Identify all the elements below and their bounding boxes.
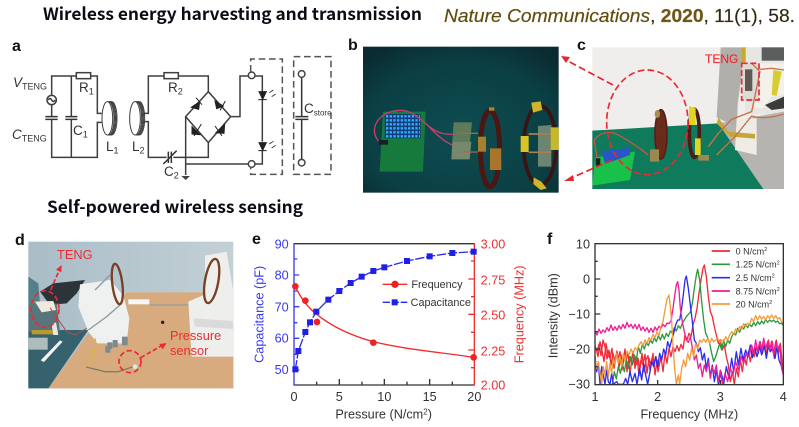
red dashed circle	[607, 70, 688, 175]
2.5 N/cm2 blue	[595, 276, 783, 384]
tape and rectifier	[451, 122, 480, 159]
panel d: pressure sensing photo	[15, 232, 233, 388]
frequency markers	[292, 283, 477, 361]
circuit labels: 2	[140, 146, 145, 156]
capacitance line	[295, 252, 474, 369]
terminal circles	[248, 71, 305, 167]
dark green background	[363, 47, 559, 193]
panel e: pressure chart	[252, 231, 527, 422]
axes frame	[595, 244, 783, 385]
panel a: circuit diagram	[12, 38, 332, 180]
bridge rectifier diodes	[191, 98, 225, 136]
legend	[383, 279, 471, 309]
circuit labels: C	[304, 101, 314, 116]
secondary circuit wiring	[144, 76, 262, 175]
circuit labels: L	[106, 139, 114, 154]
legend: 20 N/cm	[736, 299, 769, 309]
x axis title: Pressure (N/cm	[335, 408, 423, 422]
spectra lines	[595, 265, 783, 384]
x axis tick labels: 2	[654, 390, 661, 404]
legend: 8.75 N/cm	[736, 286, 777, 296]
circuit board with LED matrix	[374, 110, 471, 172]
dashed box: LED load	[251, 59, 282, 174]
TENG label: TENG	[705, 52, 738, 66]
circuit labels	[12, 75, 332, 180]
x axis tick labels: 15	[423, 390, 437, 404]
left axis tick labels: 60	[275, 332, 289, 346]
red extra noise	[596, 342, 662, 373]
legend: 2	[769, 300, 772, 306]
legend: Frequency	[411, 279, 463, 291]
x axis tick labels	[290, 390, 481, 404]
labels in photo d: sensor	[170, 343, 209, 358]
component: AC source and capacitors	[45, 95, 77, 119]
circuit labels: L	[132, 139, 140, 154]
circuit labels: R	[79, 80, 89, 95]
legend: 0 N/cm	[736, 246, 764, 256]
wall	[28, 242, 233, 388]
arrows to panel b	[566, 60, 613, 179]
power strip and cable	[88, 275, 188, 330]
circuit labels: 2	[178, 86, 183, 96]
component: resistor R2	[164, 73, 178, 79]
legend: Capacitance	[411, 297, 471, 309]
right axis title: Frequency (MHz)	[513, 265, 527, 363]
x axis tick labels: 20	[467, 390, 481, 404]
capacitance markers	[292, 249, 477, 372]
primary circuit wiring	[52, 76, 102, 157]
left axis title: Capacitance (pF)	[252, 266, 266, 363]
right side equipment background	[718, 47, 784, 189]
circuit labels: 1	[114, 146, 119, 156]
y axis tick labels: −10	[569, 307, 590, 321]
transmitting coil with yellow tape	[521, 101, 559, 190]
x axis title: Frequency (MHz)	[640, 408, 738, 422]
dashed box: storage capacitor	[294, 57, 331, 174]
panel b: LED photo	[348, 37, 559, 193]
panel f: spectra chart	[546, 231, 787, 422]
LED board	[592, 132, 648, 186]
panel c: setup photo	[561, 37, 784, 189]
x axis tick labels: 5	[336, 390, 343, 404]
legend: 2	[777, 287, 780, 293]
red dashed rectangle around TENG	[742, 63, 759, 100]
circuit labels: R	[168, 80, 178, 95]
grey pillar	[717, 47, 745, 127]
coil L1	[102, 102, 117, 135]
coil L2	[130, 102, 145, 135]
labels in photo d	[57, 247, 221, 358]
panel e: pressure chart: e	[252, 231, 261, 248]
right axis tick labels: 3.00	[481, 237, 505, 251]
legend: 2	[764, 247, 767, 253]
storage capacitor	[295, 77, 308, 159]
TENG device	[28, 277, 87, 335]
frequency curve	[295, 286, 474, 357]
component: variable capacitor C2	[163, 151, 177, 164]
0 N/cm2 red	[595, 265, 783, 384]
right axis tick labels: 2.50	[481, 308, 505, 322]
x axis tick labels: 10	[377, 390, 391, 404]
left axis tick labels: 80	[275, 268, 289, 282]
circuit labels: 2	[174, 170, 179, 180]
labels in photo d: Pressure	[170, 328, 221, 343]
y axis tick labels	[569, 237, 590, 392]
wall	[592, 47, 784, 189]
right axis tick labels	[481, 237, 505, 392]
LEDs in dashed box	[258, 90, 276, 151]
circuit labels: 1	[83, 130, 88, 140]
coil two with tape	[689, 106, 701, 157]
right axis tick labels: 2.75	[481, 273, 505, 287]
foam boxes	[78, 252, 233, 357]
title: wireless energy harvesting: Wireless energy harvesting and transmission	[43, 0, 422, 25]
receiving coil	[478, 107, 501, 187]
ground symbol	[181, 176, 190, 180]
1.25 N/cm2 green	[612, 269, 783, 384]
circuit labels: TENG	[22, 134, 47, 144]
panel c: setup photo: c	[577, 37, 586, 54]
wooden table	[48, 292, 233, 388]
8.75 N/cm2 magenta	[595, 282, 783, 384]
red arrows	[51, 270, 162, 358]
x axis tick labels: 0	[290, 390, 298, 404]
red dashed circles	[31, 291, 141, 373]
circuit labels: TENG	[22, 82, 47, 92]
left axis tick labels: 90	[275, 237, 289, 251]
x axis title: )	[428, 408, 432, 422]
y axis tick labels: 10	[576, 237, 590, 251]
arrowheads	[561, 56, 574, 181]
coils	[110, 258, 222, 305]
right axis tick labels: 2.00	[481, 378, 505, 392]
panel f: spectra chart: f	[547, 231, 553, 248]
circuit labels: C	[73, 123, 83, 138]
circuit labels: 1	[89, 86, 94, 96]
citation: Nature Communications , 2020, 11(1), 58.	[444, 5, 795, 26]
legend: 2.5 N/cm	[736, 273, 772, 283]
white container and yellow tape	[708, 47, 784, 155]
y axis tick labels: −20	[569, 342, 590, 356]
axes frame	[294, 243, 474, 386]
rectifier modules	[650, 149, 709, 162]
component: resistor R1	[76, 73, 91, 79]
y axis title: Intensity (dBm)	[546, 273, 560, 358]
heading: self-powered wireless sensing: Self-powered wireless sensing	[47, 193, 303, 218]
panel d: pressure sensing photo: d	[15, 232, 25, 249]
x axis tick labels: 3	[717, 390, 724, 404]
left axis tick labels: 50	[275, 363, 289, 377]
20 N/cm2 orange	[595, 295, 783, 384]
y axis tick labels: −30	[569, 378, 590, 392]
x axis tick labels: 1	[591, 390, 599, 404]
left axis tick labels: 70	[275, 301, 289, 315]
x axis tick labels: 4	[780, 390, 787, 404]
legend: 2	[772, 274, 775, 280]
circuit labels: C	[12, 127, 22, 142]
optical table	[28, 330, 88, 388]
weights and wires	[86, 321, 164, 372]
arrowheads	[56, 265, 167, 349]
left axis tick labels	[275, 237, 289, 377]
circuit labels: C	[164, 164, 174, 179]
circuit labels: store	[314, 108, 332, 118]
legend	[712, 246, 780, 309]
labels in photo d: TENG	[57, 247, 93, 262]
y axis tick labels: 0	[583, 272, 590, 286]
panel b: LED photo: b	[348, 37, 358, 54]
green mat	[592, 123, 763, 189]
x axis title: 2	[423, 407, 428, 416]
legend: 2	[777, 260, 780, 266]
circuit labels: V	[13, 75, 22, 90]
coil one	[655, 110, 667, 159]
x axis tick labels	[591, 390, 787, 404]
legend: 1.25 N/cm	[736, 260, 777, 270]
right axis tick labels: 2.25	[481, 344, 505, 358]
panel a: circuit diagram: a	[12, 38, 21, 55]
